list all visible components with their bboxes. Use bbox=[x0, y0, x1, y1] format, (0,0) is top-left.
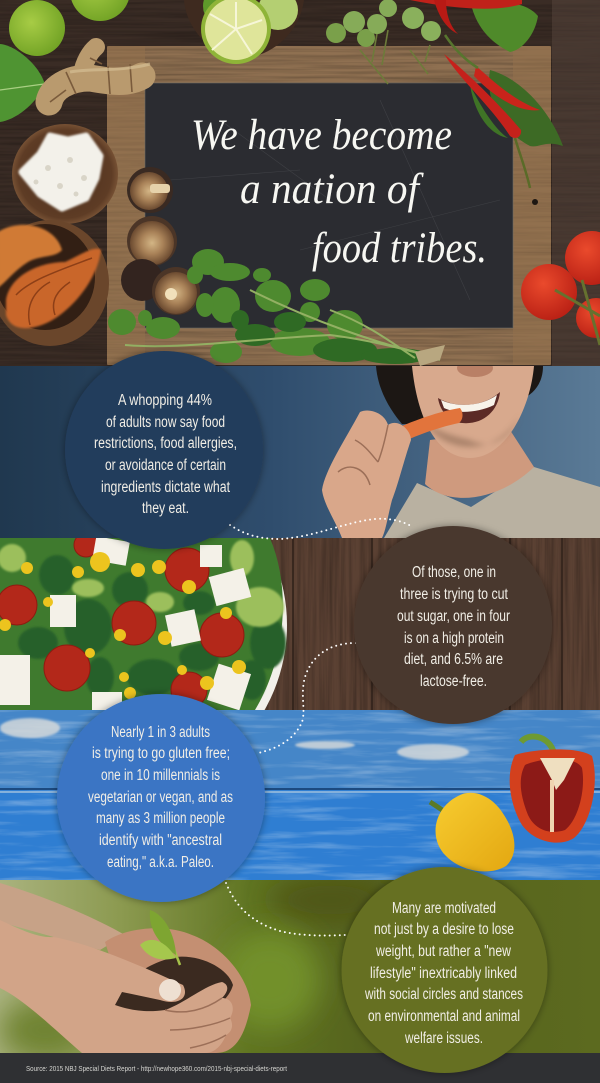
wooden frame bbox=[107, 46, 551, 365]
callout: gluten free: identify with "ancestral bbox=[99, 832, 222, 849]
panel: man eating carrot bbox=[0, 359, 600, 538]
callout: gluten free: vegetarian or vegan, and as bbox=[88, 789, 233, 806]
callout: new lifestyle: not just by a desire to lose bbox=[374, 921, 514, 938]
dotted connector: circle two to circle three bbox=[258, 643, 356, 753]
salad plate bbox=[0, 538, 287, 710]
corn bbox=[0, 552, 246, 699]
callout: 44 percent: ingredients dictate what bbox=[101, 479, 231, 496]
back hand bbox=[105, 928, 251, 1053]
footer bbox=[0, 1053, 600, 1083]
callout: sugar and protein: diet, and 6.5% are bbox=[404, 651, 503, 668]
soil bbox=[115, 956, 233, 1012]
wooden table background bbox=[0, 0, 600, 366]
upper arm bbox=[0, 883, 125, 950]
callout: sugar and protein bbox=[354, 526, 552, 724]
icon: right chillies and leaves bbox=[444, 35, 563, 188]
callout: sugar and protein: Of those, one in bbox=[412, 564, 496, 581]
tomatoes bbox=[0, 533, 244, 708]
icon: red pepper bbox=[510, 736, 595, 843]
front hand bbox=[0, 920, 233, 1053]
callout: sugar and protein: out sugar, one in four bbox=[397, 608, 510, 625]
icon: cilantro bbox=[108, 249, 445, 366]
callout: new lifestyle: with social circles and stances bbox=[364, 986, 523, 1003]
callout: gluten free bbox=[57, 694, 265, 902]
seedling bbox=[140, 910, 180, 965]
callout: gluten free: one in 10 millennials is bbox=[101, 767, 220, 784]
callout: sugar and protein: three is trying to cut bbox=[400, 586, 509, 603]
dotted connector: circle one to circle two bbox=[230, 519, 411, 539]
hand bbox=[322, 411, 411, 538]
callout: new lifestyle: Many are motivated bbox=[392, 900, 496, 917]
dotted connector: circle three to circle four bbox=[226, 883, 346, 936]
callout: new lifestyle: weight, but rather a "new bbox=[375, 943, 512, 960]
icon: green leaf left bbox=[0, 44, 45, 122]
callout: 44 percent: they eat. bbox=[142, 500, 189, 517]
callout: sugar and protein: is on a high protein bbox=[404, 630, 504, 647]
source line: Source: 2015 NBJ Special Diets Report - http://newhope360.com/2015-nbj-special-diets-report bbox=[26, 1064, 288, 1073]
callout: 44 percent: A whopping 44% bbox=[118, 392, 212, 409]
wood planks background bbox=[264, 538, 600, 710]
icon: lime bowl bbox=[184, 0, 304, 64]
icon: top chillies and leaf bbox=[410, 0, 538, 52]
title: a nation of bbox=[240, 166, 424, 213]
callout: gluten free: eating," a.k.a. Paleo. bbox=[107, 854, 214, 871]
callout: gluten free: many as 3 million people bbox=[96, 810, 225, 827]
icon: mushrooms bbox=[121, 167, 200, 315]
callout: new lifestyle bbox=[342, 867, 548, 1073]
callout: new lifestyle: on environmental and animal bbox=[368, 1008, 520, 1025]
callout: gluten free: Nearly 1 in 3 adults bbox=[111, 724, 210, 741]
callout: 44 percent bbox=[65, 351, 263, 549]
callout: 44 percent: of adults now say food bbox=[106, 414, 225, 431]
icon: ginger root bbox=[49, 47, 150, 102]
icon: pea eggplants bbox=[326, 0, 441, 84]
icon: yellow pepper bbox=[430, 793, 514, 871]
callout: new lifestyle: welfare issues. bbox=[404, 1030, 483, 1047]
panel: salad on wood bbox=[0, 538, 600, 710]
cheese cubes bbox=[0, 536, 251, 710]
carrot bbox=[402, 408, 462, 438]
title: We have become bbox=[191, 112, 452, 159]
callout: gluten free: is trying to go gluten free; bbox=[92, 745, 230, 762]
icon: tomatoes bbox=[521, 231, 600, 345]
callout: sugar and protein: lactose-free. bbox=[420, 673, 487, 690]
callout: new lifestyle: lifestyle" inextricably linked bbox=[370, 965, 517, 982]
blue boards background bbox=[0, 710, 600, 880]
blue background bbox=[0, 366, 600, 538]
panel: hero chalkboard photo bbox=[0, 0, 600, 366]
title bbox=[191, 112, 487, 272]
icon: limes bbox=[9, 0, 130, 56]
chalkboard bbox=[145, 83, 513, 328]
icon: bowl of rice bbox=[12, 124, 118, 224]
icon: bowl of shrimp bbox=[0, 220, 109, 346]
man photo bbox=[376, 359, 600, 538]
callout: 44 percent: or avoidance of certain bbox=[105, 457, 226, 474]
title: food tribes. bbox=[312, 225, 487, 272]
panel: blue painted wood with peppers bbox=[0, 710, 600, 880]
callout: 44 percent: restrictions, food allergies, bbox=[94, 435, 237, 452]
panel: hands with seedling bbox=[0, 876, 600, 1060]
olive background bbox=[0, 876, 600, 1060]
